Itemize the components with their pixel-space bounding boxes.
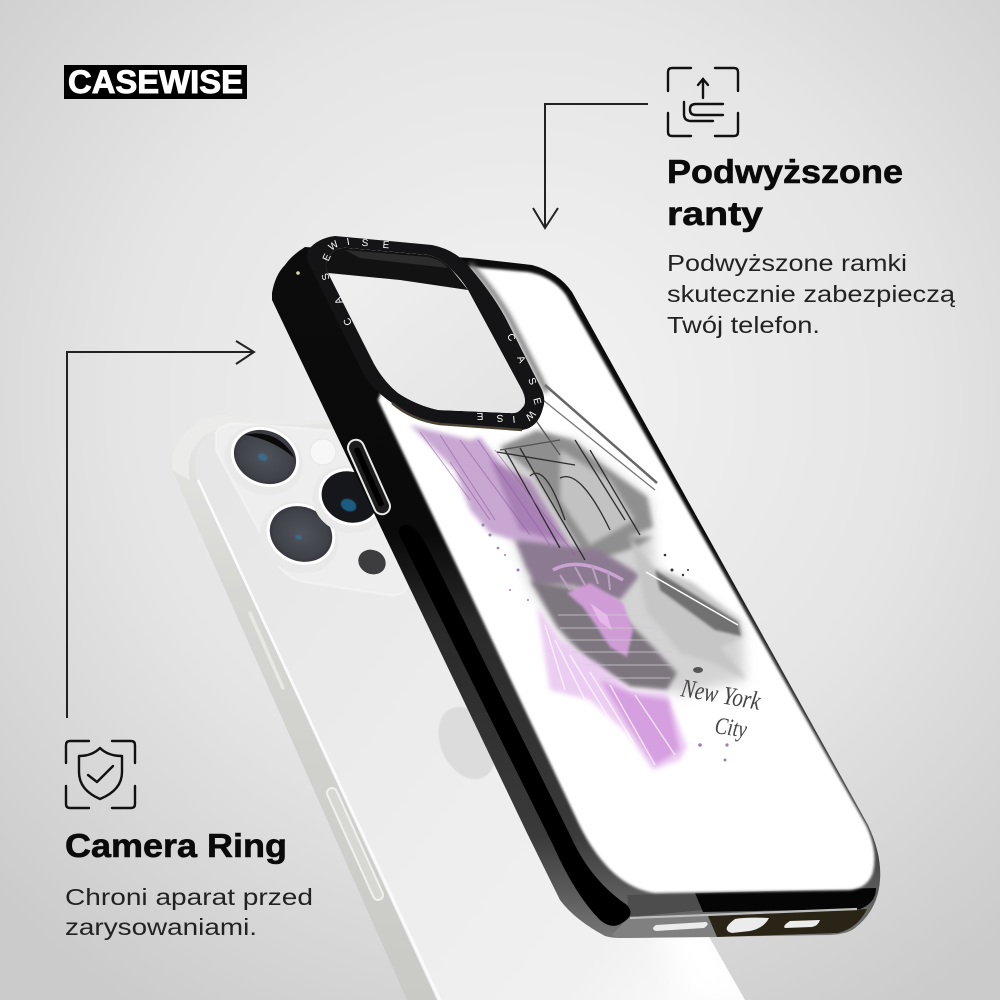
- ink splatter: [664, 554, 703, 673]
- heading: camera ring: Camera Ring: [65, 827, 287, 864]
- side buttons: [250, 613, 283, 688]
- ring lettering: E: [321, 252, 334, 263]
- text: camera ring description: [65, 884, 313, 940]
- heading: raised edges: [667, 153, 903, 232]
- black case: [272, 247, 880, 938]
- ring lettering: A: [333, 295, 346, 306]
- text: camera ring description: zarysowaniami.: [65, 914, 257, 940]
- case corner glint: [296, 271, 300, 275]
- ring lettering: I: [512, 413, 516, 424]
- ring lettering: W: [327, 239, 341, 253]
- text: raised edges description: [667, 250, 955, 338]
- sensor: [354, 545, 390, 579]
- purple splatter: [482, 524, 729, 762]
- ring lettering: E: [530, 397, 543, 406]
- ring lettering: [320, 237, 543, 424]
- volume button: [345, 437, 393, 517]
- logo: CASEWISE: CASEWISE: [68, 64, 243, 100]
- ring lettering: S: [525, 376, 538, 387]
- ring lettering: S: [496, 412, 503, 423]
- heading: raised edges: ranty: [667, 195, 764, 232]
- lens: right: [302, 455, 396, 545]
- window reflection: [326, 248, 468, 290]
- text: camera ring description: Chroni aparat przed: [65, 884, 313, 910]
- icon: raised edges: [668, 68, 738, 136]
- bridge cables: [497, 385, 738, 625]
- ring lettering: A: [514, 354, 527, 365]
- ring lettering: S: [320, 271, 333, 282]
- artwork script: New York City: City: [713, 713, 749, 743]
- camera ring: [307, 236, 547, 430]
- ring lettering: E: [476, 410, 483, 421]
- robe streaks: [545, 625, 675, 765]
- bottom olive port strip: [708, 909, 867, 937]
- ring lettering: W: [522, 408, 537, 423]
- arrow: top callout to raised edge: [533, 104, 648, 228]
- ports: [653, 918, 820, 933]
- bottom highlight: [630, 909, 857, 918]
- bottom edge dark band: [695, 888, 876, 912]
- ring lettering: C: [342, 316, 355, 327]
- artwork script: New York City: New York: [678, 673, 763, 716]
- text: raised edges description: skutecznie zabezpieczą: [667, 281, 955, 307]
- bottom grey strip lower: [612, 915, 717, 938]
- artwork: bridge and statue: [410, 385, 747, 770]
- text: raised edges description: Podwyższone ramki: [667, 250, 907, 276]
- ring lettering: E: [382, 240, 390, 251]
- apple logo shade: [438, 707, 494, 779]
- camera bump: [216, 424, 408, 595]
- ring base highlight: [392, 403, 522, 430]
- text: raised edges description: Twój telefon.: [667, 312, 820, 338]
- lens: bottom: [249, 489, 350, 586]
- lens: top: [213, 412, 314, 507]
- flash: [310, 439, 336, 465]
- ring lettering: C: [504, 332, 517, 343]
- arrow: camera ring callout: [67, 341, 254, 718]
- artwork script: New York City: [678, 673, 763, 743]
- purple streaks: [420, 432, 575, 555]
- side slot: [398, 525, 631, 926]
- screen artwork panel: [378, 267, 874, 893]
- ring lettering: I: [346, 237, 351, 248]
- ring lettering: S: [361, 238, 369, 249]
- icon: shield check: [66, 741, 135, 808]
- white phone back: [172, 412, 760, 1000]
- statue stripes: [558, 615, 672, 678]
- bottom grey strip upper: [627, 893, 703, 917]
- heading: raised edges: Podwyższone: [667, 153, 903, 190]
